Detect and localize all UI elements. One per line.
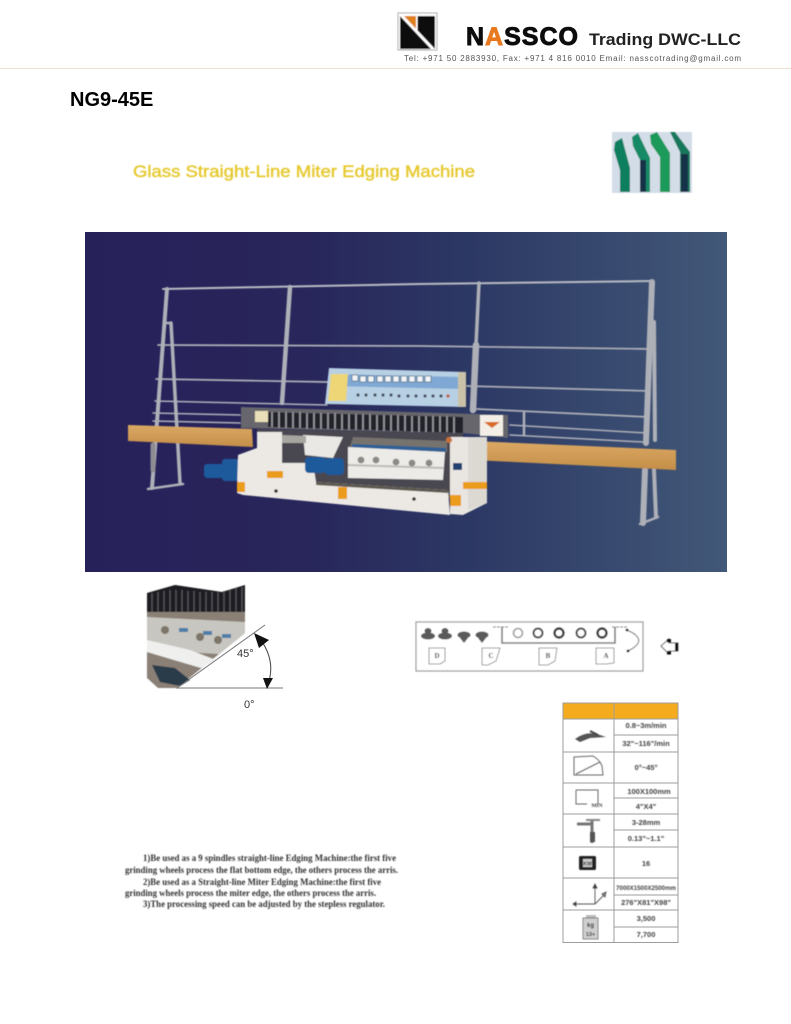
company name: NASSCO — [466, 23, 578, 51]
icon: green glass edge samples — [612, 132, 692, 193]
specification values: 100X100mm — [627, 787, 671, 796]
angle label 45 degrees: 45° — [237, 648, 254, 660]
wheel group C — [458, 632, 488, 643]
feature description text: grinding wheels process the miter edge, the others process the arris. — [125, 889, 376, 899]
machine illustration — [128, 281, 676, 524]
icon: weight — [583, 915, 598, 939]
spindle dials — [358, 457, 432, 466]
icon: minimum glass size — [576, 790, 603, 809]
specification values: 3-28mm — [632, 818, 660, 827]
orange labels — [237, 471, 487, 506]
spindle motors — [305, 457, 344, 475]
specification values: 3,500 — [637, 914, 655, 923]
tag letters: D — [434, 652, 440, 660]
spindle panel — [350, 437, 447, 452]
icon: minimum glass size: MIN — [591, 803, 603, 809]
feature description text: grinding wheels process the flat bottom edge, the others process the arris. — [125, 866, 398, 876]
icon: overall dimensions — [573, 884, 606, 906]
icon: miter angle — [574, 756, 603, 775]
icon: glass thickness — [577, 820, 600, 843]
company header — [398, 13, 741, 63]
arrow: feed direction — [661, 639, 678, 654]
specification values — [616, 721, 676, 939]
icon: weight: 13+ — [586, 932, 595, 938]
feature description text: 1)Be used as a 9 spindles straight-line Edging Machine:the first five — [143, 853, 396, 864]
icon: motor power — [579, 856, 596, 870]
page tags — [429, 648, 614, 665]
model heading: NG9-45E — [70, 89, 153, 111]
angle lines and arc — [177, 625, 283, 688]
company tagline: Trading DWC-LLC — [589, 30, 741, 49]
blue drive motor — [204, 459, 239, 481]
icon: motor power: KW — [583, 862, 592, 868]
specifications table — [563, 703, 678, 942]
panel: machine photo — [85, 232, 727, 572]
product title: Glass Straight-Line Miter Edging Machine — [133, 162, 475, 181]
grinding head — [241, 407, 508, 438]
specification values: 7000X1500X2500mm — [616, 885, 676, 892]
icon: weight: kg — [587, 923, 594, 929]
spec icons — [573, 731, 606, 939]
specification values: 276"X81"X98" — [621, 898, 671, 907]
specification values: 7,700 — [637, 930, 655, 939]
grinding wheel carriage — [303, 435, 343, 458]
tag letters — [434, 652, 609, 660]
specification values: 0.8~3m/min — [625, 721, 667, 730]
rotation arc — [626, 629, 639, 652]
tag letters: A — [603, 652, 609, 660]
detail photo of grinding wheels — [147, 585, 245, 688]
right wooden beam — [473, 441, 676, 470]
angle arrowheads — [254, 633, 273, 689]
specification values: 4"X4" — [636, 802, 657, 811]
feature description text — [125, 853, 398, 910]
feature description text: 3)The processing speed can be adjusted by the stepless regulator. — [143, 899, 385, 910]
contact details: Tel: +971 50 2883930, Fax: +971 4 816 0010 Email: nasscotrading@gmail.com — [404, 54, 741, 63]
specification values: 32"~116"/min — [622, 739, 670, 748]
tag letters: C — [488, 652, 494, 660]
base bolts — [274, 489, 416, 501]
miter detail diagram — [147, 585, 283, 711]
specification values: 16 — [642, 859, 650, 868]
icon: feed speed — [575, 731, 606, 742]
glass support frame — [148, 281, 658, 524]
left wooden beam — [128, 425, 253, 447]
angle label 0 degrees: 0° — [244, 699, 255, 711]
specification values: 0°~45° — [635, 763, 657, 772]
machine body — [257, 429, 463, 500]
specification values: 0.13"~1.1" — [628, 834, 665, 843]
icon: company logo — [398, 13, 437, 50]
wheel group B and A — [514, 628, 606, 638]
control panel — [325, 368, 466, 407]
tag letters: B — [546, 652, 551, 660]
spindle layout diagram — [416, 622, 643, 671]
feature description text: 2)Be used as a Straight-line Miter Edging Machine:the first five — [143, 877, 381, 888]
conveyor bracket — [502, 627, 615, 643]
wheel group D — [421, 628, 452, 640]
